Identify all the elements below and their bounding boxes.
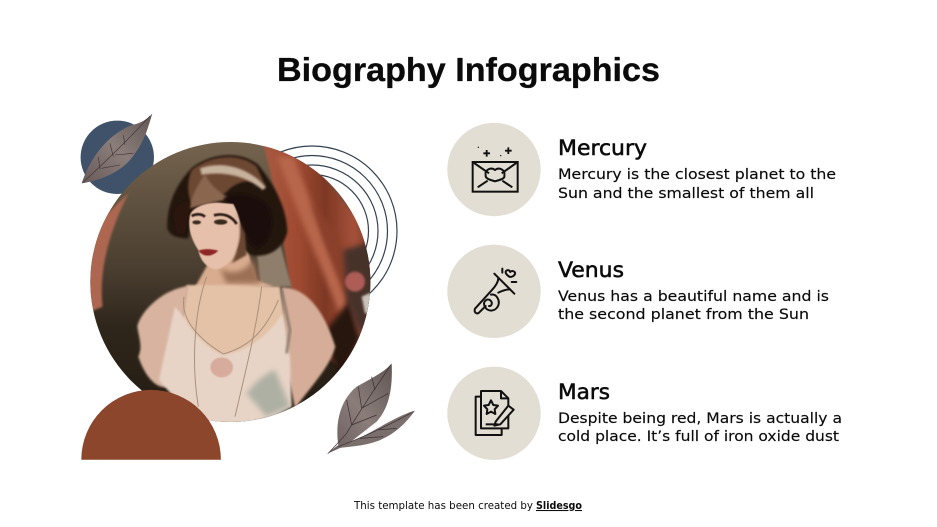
hair back — [167, 155, 287, 256]
footer credit: This template has been created by — [353, 500, 533, 512]
sleeves — [137, 286, 188, 387]
item: Venus — [447, 245, 829, 338]
neck — [194, 250, 272, 288]
text: Venus has a beautiful name and is — [558, 288, 829, 305]
title: Biography Infographics — [277, 51, 660, 88]
text: Despite being red, Mars is actually a — [558, 410, 842, 427]
concentric rings — [227, 146, 397, 316]
item: Mars — [447, 367, 842, 460]
chest — [182, 284, 286, 356]
leaf: top left — [82, 113, 152, 183]
dress — [159, 307, 292, 423]
necklace — [183, 277, 278, 417]
footer credit: Slidesgo — [536, 500, 582, 512]
icon: love letter — [447, 123, 541, 216]
text: cold place. It’s full of iron oxide dust — [558, 428, 839, 445]
portrait photo — [87, 140, 377, 427]
face — [189, 203, 242, 269]
heading: Venus — [558, 258, 624, 282]
item: Mercury — [447, 123, 836, 216]
heading: Mars — [558, 380, 610, 404]
text: Sun and the smallest of them all — [558, 185, 814, 202]
leaves: bottom right — [327, 363, 415, 454]
icon: trumpet with heart — [447, 245, 541, 338]
semicircle — [81, 390, 221, 460]
illustration: portrait collage — [81, 113, 415, 460]
text: Mercury is the closest planet to the — [558, 166, 836, 183]
text: the second planet from the Sun — [558, 306, 809, 323]
blue circle — [81, 121, 154, 194]
icon: document with star and pen — [447, 367, 541, 460]
heading: Mercury — [558, 136, 647, 160]
